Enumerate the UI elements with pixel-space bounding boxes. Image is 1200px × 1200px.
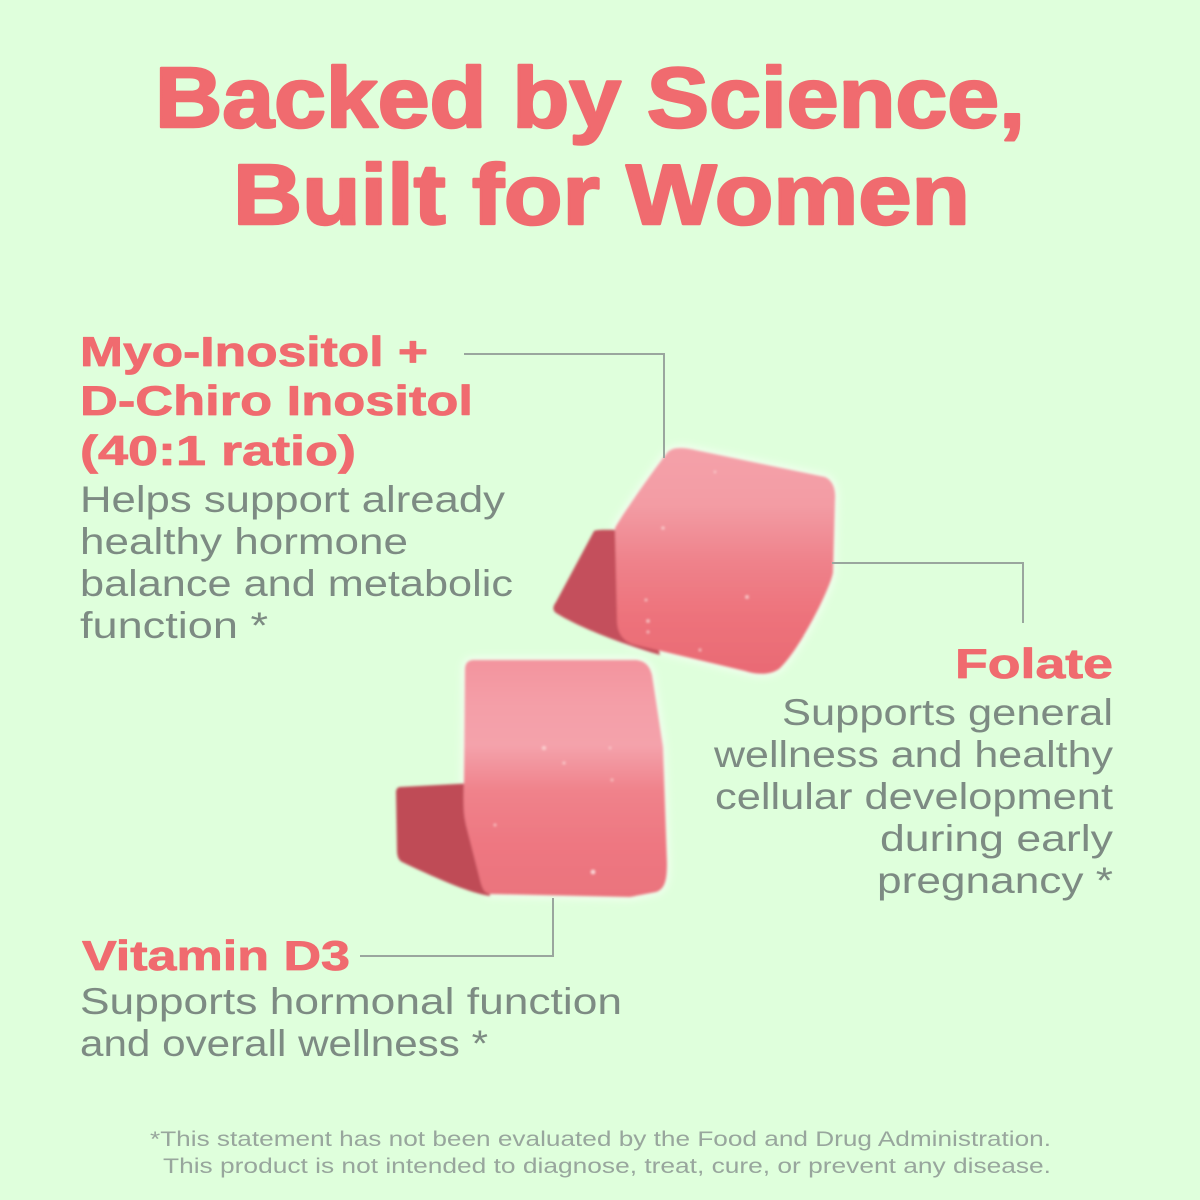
heading: inositol: (40:1 ratio) xyxy=(80,427,356,474)
body: vitamin D3 xyxy=(80,981,622,1064)
footnote: *This statement has not been evaluated by the Food and Drug Administration. xyxy=(150,1128,1051,1151)
body: folate: during early xyxy=(880,818,1114,859)
title: Built for Women xyxy=(233,148,970,243)
body: inositol: function * xyxy=(80,605,268,646)
body: vitamin D3: and overall wellness * xyxy=(80,1023,488,1064)
body: folate: pregnancy * xyxy=(877,860,1113,901)
heading: folate: Folate xyxy=(955,640,1113,687)
title xyxy=(155,51,1025,243)
body: vitamin D3: Supports hormonal function xyxy=(80,981,622,1022)
gummy: lower left xyxy=(396,660,667,897)
callout line: vitamin D3 xyxy=(360,898,553,956)
body: inositol xyxy=(80,479,513,646)
heading: vitamin D3: Vitamin D3 xyxy=(82,932,350,979)
callout line: folate xyxy=(832,563,1023,623)
body: folate xyxy=(713,692,1114,901)
body: inositol: balance and metabolic xyxy=(80,563,513,604)
heading: inositol: Myo-Inositol + xyxy=(80,328,428,375)
gummy: upper right xyxy=(553,448,835,674)
body: folate: cellular development xyxy=(715,776,1114,817)
callout line: inositol xyxy=(464,354,664,458)
body: folate: wellness and healthy xyxy=(713,734,1114,775)
heading: inositol: D-Chiro Inositol xyxy=(80,377,473,424)
text block: vitamin D3 xyxy=(80,932,622,1064)
body: inositol: healthy hormone xyxy=(80,521,408,562)
body: folate: Supports general xyxy=(782,692,1113,733)
body: inositol: Helps support already xyxy=(80,479,506,520)
footnote xyxy=(150,1128,1051,1178)
heading: inositol xyxy=(80,328,473,474)
text block: folate xyxy=(713,640,1114,901)
footnote: This product is not intended to diagnose, treat, cure, or prevent any disease. xyxy=(163,1155,1051,1178)
text block: inositol xyxy=(80,328,513,646)
title: Backed by Science, xyxy=(155,51,1025,146)
